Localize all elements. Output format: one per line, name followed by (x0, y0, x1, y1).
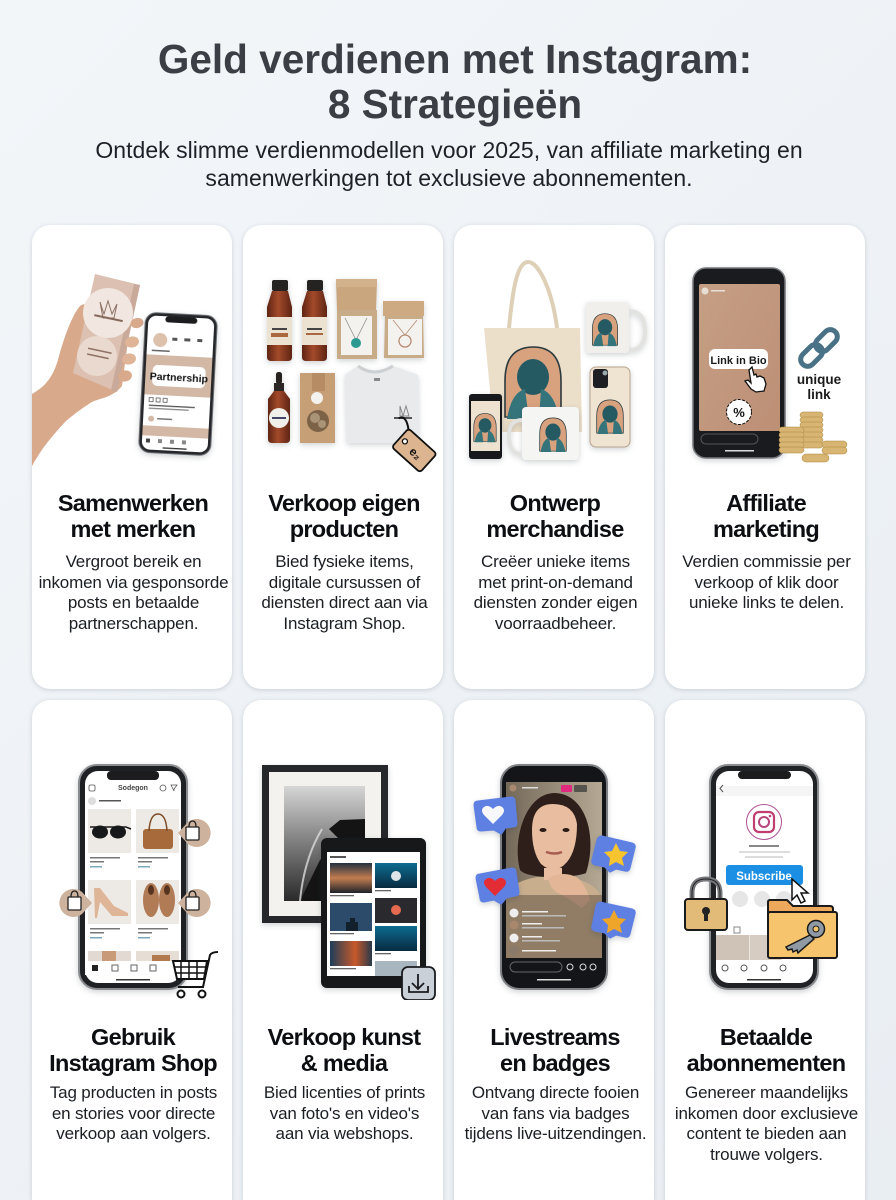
icon: chain link (798, 327, 840, 369)
phone case (590, 367, 630, 447)
small phone (469, 394, 502, 459)
heading (713, 490, 819, 542)
link in bio sticker: Link in Bio (710, 355, 767, 367)
body text: verkoop of klik door (694, 573, 838, 592)
heading: abonnementen (687, 1050, 845, 1076)
body text: Creëer unieke items (481, 552, 630, 571)
panel: affiliate marketing (665, 225, 865, 689)
heading (490, 1024, 620, 1076)
heading (486, 490, 624, 542)
subtitle: Ontdek slimme verdienmodellen voor 2025, van affiliate marketing en (95, 137, 803, 163)
body text: verkoop aan volgers. (56, 1124, 211, 1143)
illustration: livestream phone with badges (472, 764, 638, 994)
link in bio sticker (709, 349, 768, 369)
panel: verkoop eigen producten (243, 225, 443, 689)
body text: Bied licenties of prints (264, 1083, 425, 1102)
mug 2 (509, 407, 579, 460)
body text (682, 552, 851, 612)
body text: diensten zonder eigen (474, 593, 637, 612)
body text: van foto's en video's (270, 1104, 419, 1123)
heading: Ontwerp (510, 490, 600, 516)
body text: voorraadbeheer. (495, 614, 616, 633)
icon: percent badge: % (733, 405, 745, 420)
heading: en badges (500, 1050, 610, 1076)
body text (474, 552, 637, 633)
heading: met merken (71, 516, 195, 542)
illustration: phone with link in bio, link icon and coins (690, 266, 848, 464)
icon: download (402, 967, 435, 1000)
icon: padlock (685, 879, 727, 930)
body text: Genereer maandelijks (685, 1083, 848, 1102)
title: 8 Strategieën (328, 81, 582, 127)
body text (50, 1083, 217, 1143)
heading: Verkoop kunst (268, 1024, 420, 1050)
body text (464, 1083, 646, 1143)
heading (268, 490, 420, 542)
subscribe button: Subscribe (736, 871, 792, 883)
heading (49, 1024, 217, 1076)
body text: inkomen via gesponsorde (39, 573, 228, 592)
heading: Livestreams (490, 1024, 620, 1050)
icon: heart badge white (475, 798, 516, 833)
body text: Tag producten in posts (50, 1083, 217, 1102)
body text: aan via webshops. (276, 1124, 413, 1143)
icon: heart badge red (477, 869, 518, 903)
icon: pointer hand (745, 367, 766, 392)
panel: verkoop kunst en media (243, 700, 443, 1200)
illustration: shop phone with bags and cart: Sodegon (118, 785, 148, 792)
tablet (321, 838, 426, 988)
body text (39, 552, 228, 633)
icon: shopping cart (173, 952, 218, 998)
comments overlay (506, 895, 602, 958)
body text: unieke links te delen. (689, 593, 844, 612)
body text: posts en betaalde (68, 593, 199, 612)
panel: ontwerp merchandise (454, 225, 654, 689)
illustration: product flat lay with price tag (264, 278, 436, 472)
heading: Verkoop eigen (268, 490, 420, 516)
panel: samenwerken met merken (32, 225, 232, 689)
heading: Samenwerken (58, 490, 208, 516)
body text: digitale cursussen of (269, 573, 420, 592)
illustration: shop phone with bags and cart (59, 764, 218, 998)
panel: gebruik instagram shop (32, 700, 232, 1200)
illustration: hand with product box and partnership phone (32, 274, 220, 466)
products (88, 809, 179, 965)
heading (687, 1024, 845, 1076)
illustration: tote, mugs and phone cases (466, 260, 650, 464)
coins (779, 412, 847, 462)
body text: met print-on-demand (478, 573, 633, 592)
icon: cursor (792, 879, 808, 903)
body text (264, 1083, 425, 1143)
icon: percent badge (726, 400, 752, 424)
body text: partnerschappen. (69, 614, 198, 633)
body text: Instagram Shop. (283, 614, 406, 633)
heading: producten (290, 516, 398, 542)
mug (586, 302, 645, 353)
heading: merchandise (486, 516, 624, 542)
heading: Instagram Shop (49, 1050, 217, 1076)
heading: Betaalde (720, 1024, 812, 1050)
heading (268, 1024, 421, 1076)
icon: shopping tag bubbles (59, 819, 211, 917)
body text: trouwe volgers. (710, 1145, 823, 1164)
woman (506, 793, 602, 958)
unique link label: unique (797, 372, 842, 387)
unique link label: link (807, 387, 831, 402)
body text: tijdens live-uitzendingen. (465, 1124, 646, 1143)
body text (261, 552, 428, 633)
icon: folder with key (768, 900, 837, 958)
icon: price tag: e₂ (406, 444, 425, 463)
title: Geld verdienen met Instagram: (158, 36, 752, 82)
body text: van fans via badges (482, 1104, 630, 1123)
heading (58, 490, 208, 542)
icon: star badge (593, 837, 634, 871)
illustration: subscribe phone with lock and folder (684, 764, 838, 994)
body text: Ontvang directe fooien (472, 1083, 639, 1102)
body text: diensten direct aan via (261, 593, 428, 612)
heading: & media (301, 1050, 387, 1076)
illustration: framed print and tablet gallery (260, 764, 436, 1000)
illustration: hand with product box and partnership phone: Partnership (149, 371, 208, 386)
nav (85, 961, 181, 980)
icon: instagram logo (746, 804, 782, 840)
subtitle (95, 137, 803, 191)
icon: price tag (381, 416, 440, 472)
panel: livestreams en badges (454, 700, 654, 1200)
heading: Gebruik (91, 1024, 175, 1050)
body text: en stories voor directe (52, 1104, 215, 1123)
body text: Verdien commissie per (682, 552, 851, 571)
body text (675, 1083, 858, 1164)
icon: star badge orange (593, 903, 634, 937)
body text: Vergroot bereik en (66, 552, 201, 571)
subscribe button (726, 865, 803, 885)
heading: Affiliate (726, 490, 806, 516)
heading: marketing (713, 516, 819, 542)
body text: content te bieden aan (687, 1124, 846, 1143)
body text: inkomen door exclusieve (675, 1104, 858, 1123)
title (158, 36, 752, 127)
body text: Bied fysieke items, (275, 552, 414, 571)
panel: betaalde abonnementen (665, 700, 865, 1200)
subtitle: samenwerkingen tot exclusieve abonnementen. (205, 165, 693, 191)
